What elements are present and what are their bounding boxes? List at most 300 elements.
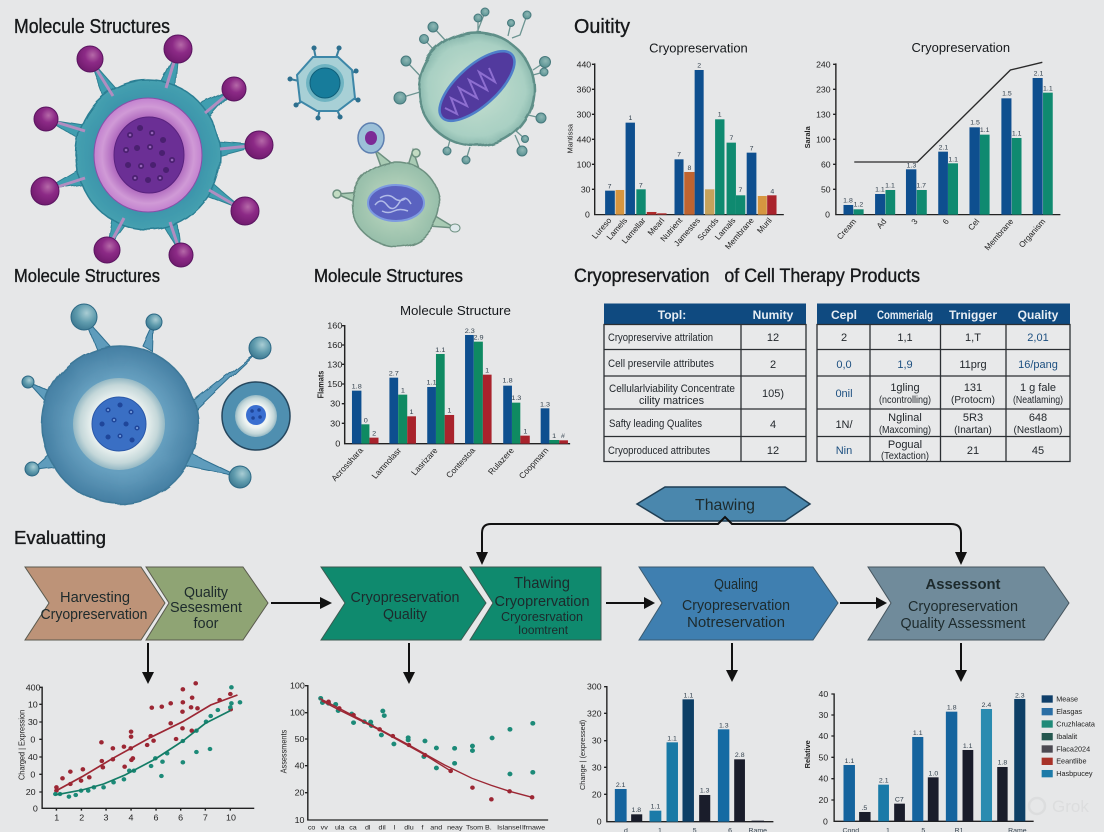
bars <box>615 699 764 822</box>
y tick labels: 30 <box>330 399 340 409</box>
y tick labels: 0 <box>30 735 36 744</box>
flow step: cryopreservation quality: Cryopreservation <box>350 589 460 606</box>
x labels: Membrane <box>723 216 756 251</box>
x labels: Lamnolasr <box>369 446 404 480</box>
x tick labels: 1 <box>54 813 59 823</box>
bar values: 1.8 <box>998 760 1007 767</box>
chart: blue and black bars <box>578 682 773 832</box>
cell values: 16/pang <box>1018 359 1058 371</box>
bar values: 2.1 <box>879 777 889 784</box>
bar values: .5 <box>861 805 867 812</box>
chart title: Molecule Structure <box>400 304 511 318</box>
bar values: 1.1 <box>427 380 437 387</box>
x tick labels: lfrnawe <box>522 824 545 831</box>
cell values: 1N/ <box>835 419 853 431</box>
flow step: thawing cryopreservation: Cryoresrvation <box>501 609 583 624</box>
cell values: (Inartan) <box>954 425 992 436</box>
y axis label: Mantissa <box>565 123 575 153</box>
arrow: to assessment <box>840 597 887 609</box>
bar values: 1.8 <box>843 197 853 204</box>
flow step: assessment: Cryopreservation <box>908 598 1018 615</box>
bar values: 1 <box>552 433 556 440</box>
red points <box>329 702 532 799</box>
red trend line <box>56 695 237 791</box>
bar values: 1.1 <box>885 183 895 190</box>
cell values: Nin <box>836 445 852 457</box>
flow step: harvesting: Cryopreservation <box>40 606 148 623</box>
bar values: 2.9 <box>473 335 484 342</box>
y axis label: Charged | Expression <box>17 710 26 780</box>
bar values: 1.3 <box>700 787 710 794</box>
x tick labels: ula <box>335 824 345 831</box>
x tick labels: 3 <box>104 813 109 823</box>
quantity values: 12 <box>767 445 779 457</box>
quantity values: 12 <box>767 332 779 344</box>
icon: large purple cell <box>31 35 273 267</box>
x labels: Jamestes <box>672 216 702 248</box>
bar values: 1.1 <box>913 730 923 737</box>
axes <box>833 63 1060 215</box>
bar values: 0 <box>364 418 368 424</box>
flow step: quality assessment <box>146 567 268 640</box>
x tick labels: co <box>308 824 316 831</box>
x tick labels: I <box>394 824 396 831</box>
x tick labels: 6 <box>154 813 159 823</box>
row labels: cility matrices <box>639 395 704 407</box>
bar values <box>843 71 1053 209</box>
bar values: 1.5 <box>970 120 980 127</box>
bar values: 7 <box>739 187 743 194</box>
chart: cryopreservation bars with line right <box>803 40 1060 252</box>
y tick labels: 400 <box>26 683 41 692</box>
legend: Mease <box>1056 696 1078 704</box>
cell values: 11prg <box>959 359 987 371</box>
quantity values: 4 <box>770 419 776 431</box>
bar values: 7 <box>729 135 734 142</box>
bar values: 1.8 <box>632 807 641 814</box>
header labels: Topl: <box>658 308 686 322</box>
bar values: 1.1 <box>435 347 445 354</box>
header row <box>604 304 806 324</box>
cell values: 0,0 <box>836 359 852 371</box>
chart: scatter rising <box>17 683 254 823</box>
cell values: (Nestlaom) <box>1014 425 1062 436</box>
bars <box>843 78 1053 215</box>
bar values: 1.1 <box>875 187 885 194</box>
table grid <box>604 324 806 462</box>
flow step: thawing cryopreservation <box>470 567 601 640</box>
quantity values: 105) <box>762 388 784 400</box>
arrow: to cryopreservation <box>271 597 332 609</box>
axes <box>592 63 784 215</box>
bar values: 1 <box>629 115 633 122</box>
table grid <box>817 324 1070 462</box>
bar values: 4 <box>770 188 775 195</box>
watermark: grok <box>1029 797 1089 816</box>
flow step: assessment <box>868 567 1069 640</box>
icon: large green cell with mitochondrion <box>394 8 550 164</box>
cell values: 0nil <box>835 388 853 400</box>
legend: Ibalalit <box>1056 733 1077 741</box>
bar values: 8 <box>688 165 692 172</box>
y tick labels: 40 <box>28 752 38 762</box>
legend: Elasgas <box>1056 708 1083 716</box>
y tick labels <box>290 681 305 825</box>
bar values: 2.3 <box>1015 692 1025 699</box>
cell values: 5R3 <box>963 412 983 424</box>
heading: molecule structures middle: Molecule Structures <box>314 266 463 286</box>
y tick labels: 300 <box>577 109 591 119</box>
cell values: 131 <box>964 382 982 394</box>
flow step: quality assessment: foor <box>194 615 218 632</box>
y tick labels: 30 <box>819 710 828 720</box>
y tick labels: 30 <box>330 419 340 428</box>
y tick labels: 100 <box>577 159 591 169</box>
flow step: harvesting: Harvesting <box>60 589 130 606</box>
x labels: Contestoa <box>444 445 477 480</box>
teal trend line <box>55 711 230 795</box>
x tick labels: 6 <box>178 813 183 823</box>
y tick labels: 20 <box>26 787 36 797</box>
x labels: Rulazere <box>486 445 516 476</box>
y tick labels: 50 <box>295 734 305 744</box>
bar values: 1.3 <box>540 402 550 408</box>
x labels <box>590 216 774 251</box>
y tick labels: 100 <box>290 708 305 718</box>
y tick labels: 0 <box>597 817 602 827</box>
axes <box>604 686 773 822</box>
x labels: Lamals <box>713 216 737 242</box>
x labels: Organism <box>1017 217 1047 249</box>
bars <box>605 70 777 215</box>
teal points <box>55 687 240 797</box>
arrow: down to final bar chart <box>955 643 967 682</box>
header labels <box>658 308 794 322</box>
flow step: thawing cryopreservation: Cryoprervation <box>494 593 590 610</box>
watermark: grok: Grok <box>1052 797 1089 816</box>
header labels: Numity <box>753 308 794 322</box>
x labels <box>329 445 551 483</box>
y tick labels: 40 <box>819 689 828 699</box>
cell values: 1 g fale <box>1020 382 1056 394</box>
header labels: Quality <box>1018 308 1059 322</box>
cell values: 21 <box>967 445 979 457</box>
y tick labels: 20 <box>819 795 828 805</box>
x labels: Mearl <box>646 216 666 237</box>
axes <box>831 693 1034 821</box>
y tick labels: 100 <box>290 681 305 691</box>
flow step: quality assessment: Quality <box>184 584 228 601</box>
y tick labels: 60 <box>821 159 831 169</box>
row labels <box>608 332 735 457</box>
axes <box>39 687 254 811</box>
legend: Flaca2024 <box>1056 745 1090 753</box>
row labels: Cryopreservive attrilation <box>608 332 713 344</box>
flow step: quality assessment: Sesesment <box>170 599 243 616</box>
chart title: Cryopreservation <box>649 41 748 56</box>
cell values: 1,T <box>965 332 981 344</box>
x tick labels: Islansel <box>497 824 522 831</box>
cell values: (ncontrolling) <box>879 395 931 406</box>
y axis label: Sarala <box>803 126 812 148</box>
heading: molecule structures top: Molecule Structures <box>14 16 170 38</box>
cell values: Pogual <box>888 439 922 451</box>
x tick labels <box>54 813 236 823</box>
y tick labels <box>327 321 343 449</box>
cell values: 1,1 <box>897 332 913 344</box>
x labels: Acrosshara <box>329 445 365 483</box>
x labels: Coopmarn <box>516 445 551 480</box>
bar values <box>608 62 775 195</box>
header labels: Cepl <box>831 308 857 322</box>
bar values: 2.1 <box>616 782 626 789</box>
flow box: thawing hexagon <box>637 487 810 521</box>
cell values: (Neatlaming) <box>1013 395 1063 406</box>
bar values: 1.1 <box>651 803 660 810</box>
bar values: 1.3 <box>907 163 917 170</box>
legend: Cruzhlacata <box>1056 720 1095 728</box>
y tick labels: 10 <box>28 700 38 709</box>
bar values: 1.5 <box>1002 91 1012 98</box>
y tick labels: 230 <box>816 84 831 94</box>
y tick labels: 30 <box>592 762 602 772</box>
bar values: 1 <box>485 368 489 375</box>
bar values: 1 <box>401 388 405 394</box>
y tick labels: 0 <box>33 804 38 813</box>
y tick labels: 160 <box>327 321 343 331</box>
cell values: 648 <box>1029 412 1047 424</box>
x labels: 3 <box>910 217 920 226</box>
y tick labels: 160 <box>327 340 343 350</box>
heading: molecule structures middle left: Molecule Structures <box>14 266 160 286</box>
arrow: down to scatter two <box>403 643 415 684</box>
flow step: qualing: Notreservation <box>687 614 785 631</box>
icon: lower green cell with bud <box>333 123 460 246</box>
x tick labels: dl <box>365 824 371 831</box>
header labels <box>831 308 1059 322</box>
bar values: 7 <box>639 182 643 189</box>
bar values: 7 <box>608 183 612 190</box>
x labels: 6 <box>941 217 951 226</box>
bar values: # <box>561 433 565 440</box>
x labels: Scands <box>696 216 720 242</box>
header labels: Trnigger <box>949 308 997 322</box>
bar values: 2.1 <box>939 144 948 151</box>
y tick labels: 440 <box>577 59 591 69</box>
arrow: to qualing <box>606 597 655 609</box>
bar values: 2 <box>372 431 376 437</box>
header labels: Commerialg <box>877 308 933 322</box>
heading: cryopreservation of cell therapy products: Cryopreservation of Cell Therapy Products <box>574 266 920 287</box>
bar values: 1 <box>523 429 528 435</box>
y axis label: Relative <box>803 740 812 768</box>
x labels: Lamels <box>605 216 629 242</box>
y tick labels: 0 <box>335 439 340 449</box>
legend: Hasbpucey <box>1056 770 1093 778</box>
bar values <box>352 328 565 440</box>
teal points <box>321 698 533 774</box>
x labels: Nutrient <box>659 216 685 243</box>
bar values: 1.1 <box>980 127 990 134</box>
cell values <box>835 332 1063 462</box>
x tick labels: 2 <box>79 813 84 823</box>
trend line <box>854 62 1042 162</box>
y tick labels: 30 <box>592 736 602 746</box>
bar values <box>616 692 745 814</box>
cell values: (Protocm) <box>951 395 995 406</box>
bar values: 7 <box>750 146 754 153</box>
bar values: 1.8 <box>352 384 362 390</box>
flow box: thawing hexagon: Thawing <box>695 497 755 514</box>
heading: evaluating: Evaluatting <box>14 528 106 548</box>
flow step: harvesting <box>25 567 165 640</box>
table: commercial, trigger, quality <box>817 304 1070 462</box>
bar values: 1.1 <box>963 743 973 750</box>
y tick labels: 300 <box>587 682 602 692</box>
connector: thawing branch arrows <box>476 517 967 565</box>
bar values: 1.8 <box>947 705 957 712</box>
x tick labels: 7 <box>203 813 208 823</box>
bar values: 7 <box>677 152 681 159</box>
y tick labels: 40 <box>819 774 828 784</box>
bar values: 1.1 <box>1043 85 1053 92</box>
y tick labels: 0 <box>823 816 828 826</box>
chart title: Cryopreservation <box>912 40 1010 55</box>
bar values: 1.1 <box>667 735 677 742</box>
cell values: (Maxcoming) <box>879 425 931 436</box>
legend <box>1042 695 1095 778</box>
x tick labels: and <box>430 824 442 831</box>
x tick labels: neay <box>447 824 463 831</box>
row labels: Safty leading Qualites <box>609 418 702 430</box>
bar values: 1.3 <box>719 722 729 729</box>
x labels: Lamellar <box>620 216 648 245</box>
cell values: 2 <box>841 332 847 344</box>
y tick labels: 0 <box>825 209 830 219</box>
x labels: Cream <box>835 217 858 241</box>
bar values: 1.1 <box>845 758 854 765</box>
row labels: Cellularlviability Concentrate <box>609 383 735 395</box>
x tick labels: dil <box>379 824 386 831</box>
cell values: 2,01 <box>1027 332 1049 344</box>
x labels: Cel <box>966 217 982 232</box>
y tick labels <box>577 59 591 219</box>
bar values: 1 <box>410 409 414 416</box>
x labels: Lasrizare <box>409 445 440 477</box>
icon: small blue cell <box>222 382 290 450</box>
y tick labels: 30 <box>581 184 591 194</box>
y tick labels: 360 <box>577 84 591 94</box>
y tick labels: 0 <box>30 770 36 779</box>
flow step: qualing: Qualing <box>714 576 758 593</box>
y tick labels <box>587 682 602 827</box>
y tick labels: 50 <box>821 184 831 194</box>
y tick labels: 30 <box>28 717 38 727</box>
cell values: 1gling <box>890 382 920 394</box>
y tick labels: 150 <box>327 379 343 389</box>
bar values: 2.4 <box>982 702 992 709</box>
x tick labels: vv <box>321 824 328 831</box>
header row <box>817 304 1070 324</box>
chart: scatter falling <box>279 681 548 831</box>
bar values: 1 <box>718 112 722 119</box>
flow step: thawing cryopreservation: Ioomtrent <box>518 623 569 637</box>
y tick labels: 240 <box>816 59 831 69</box>
row labels: Cell preservile attributes <box>608 358 714 370</box>
y axis label: Flamats <box>316 371 326 398</box>
x tick labels: Tsom B. <box>466 824 492 831</box>
chart: cryopreservation bars left <box>565 41 784 251</box>
bar values: 1 <box>447 408 452 415</box>
cell values: 45 <box>1032 445 1044 457</box>
y tick labels: 20 <box>295 788 305 798</box>
flow step: qualing <box>639 567 838 640</box>
bar values: 1.7 <box>916 182 926 189</box>
cell values: (Textaction) <box>881 451 929 462</box>
y tick labels <box>816 59 831 219</box>
x labels: Membrane <box>983 217 1016 252</box>
bar values <box>845 692 1025 812</box>
bar values: 1.0 <box>929 770 938 777</box>
y tick labels: 130 <box>327 360 343 369</box>
x labels <box>624 827 767 832</box>
flow step: qualing: Cryopreservation <box>682 597 790 614</box>
flow step: assessment: Quality Assessment <box>900 615 1026 632</box>
bar values: 2.3 <box>465 328 475 335</box>
trend lines <box>320 698 532 797</box>
bars <box>843 699 1025 821</box>
axes <box>305 685 548 820</box>
cell values: 1,9 <box>897 359 913 371</box>
x tick labels: ca <box>349 824 357 831</box>
heading: quality: Ouitity <box>574 16 630 38</box>
chart: molecule structure grouped bars <box>316 304 570 483</box>
bar values: 1.1 <box>684 692 693 699</box>
bar values: 1.8 <box>503 378 513 385</box>
y tick labels <box>819 689 828 826</box>
y tick labels: 40 <box>819 731 828 741</box>
bars <box>352 335 568 444</box>
bar values: 1.1 <box>948 156 958 163</box>
bar values: 2.8 <box>735 752 745 759</box>
y tick labels: 130 <box>816 109 831 119</box>
chart: final bars with legend <box>803 689 1095 832</box>
flow step: thawing cryopreservation: Thawing <box>514 575 570 592</box>
y tick labels: 440 <box>577 134 591 144</box>
arrow: down to scatter one <box>142 643 154 684</box>
table: topic and quantity <box>604 304 806 462</box>
quantity values: 2 <box>770 359 776 371</box>
y tick labels: 100 <box>816 134 831 144</box>
bar values: 2.1 <box>1034 71 1044 78</box>
flow step: cryopreservation quality <box>321 567 486 640</box>
y tick labels: 320 <box>587 708 602 718</box>
bar values: 1.3 <box>511 395 521 402</box>
flow step: assessment: Assessont <box>926 576 1000 593</box>
x tick labels <box>308 824 545 831</box>
x tick labels: 10 <box>226 813 236 823</box>
icon: small teal cell <box>290 48 358 118</box>
y tick labels: 40 <box>295 761 305 771</box>
row labels: Cryoproduced attributes <box>608 445 710 457</box>
y tick labels: 10 <box>295 815 305 825</box>
x tick labels: dlu <box>404 824 414 831</box>
bar values: 2 <box>697 62 701 69</box>
bar values: 1.1 <box>1012 131 1022 138</box>
bar values: 2.7 <box>389 371 399 377</box>
x labels: Muril <box>755 216 774 235</box>
cell values: Nglinal <box>888 412 922 424</box>
